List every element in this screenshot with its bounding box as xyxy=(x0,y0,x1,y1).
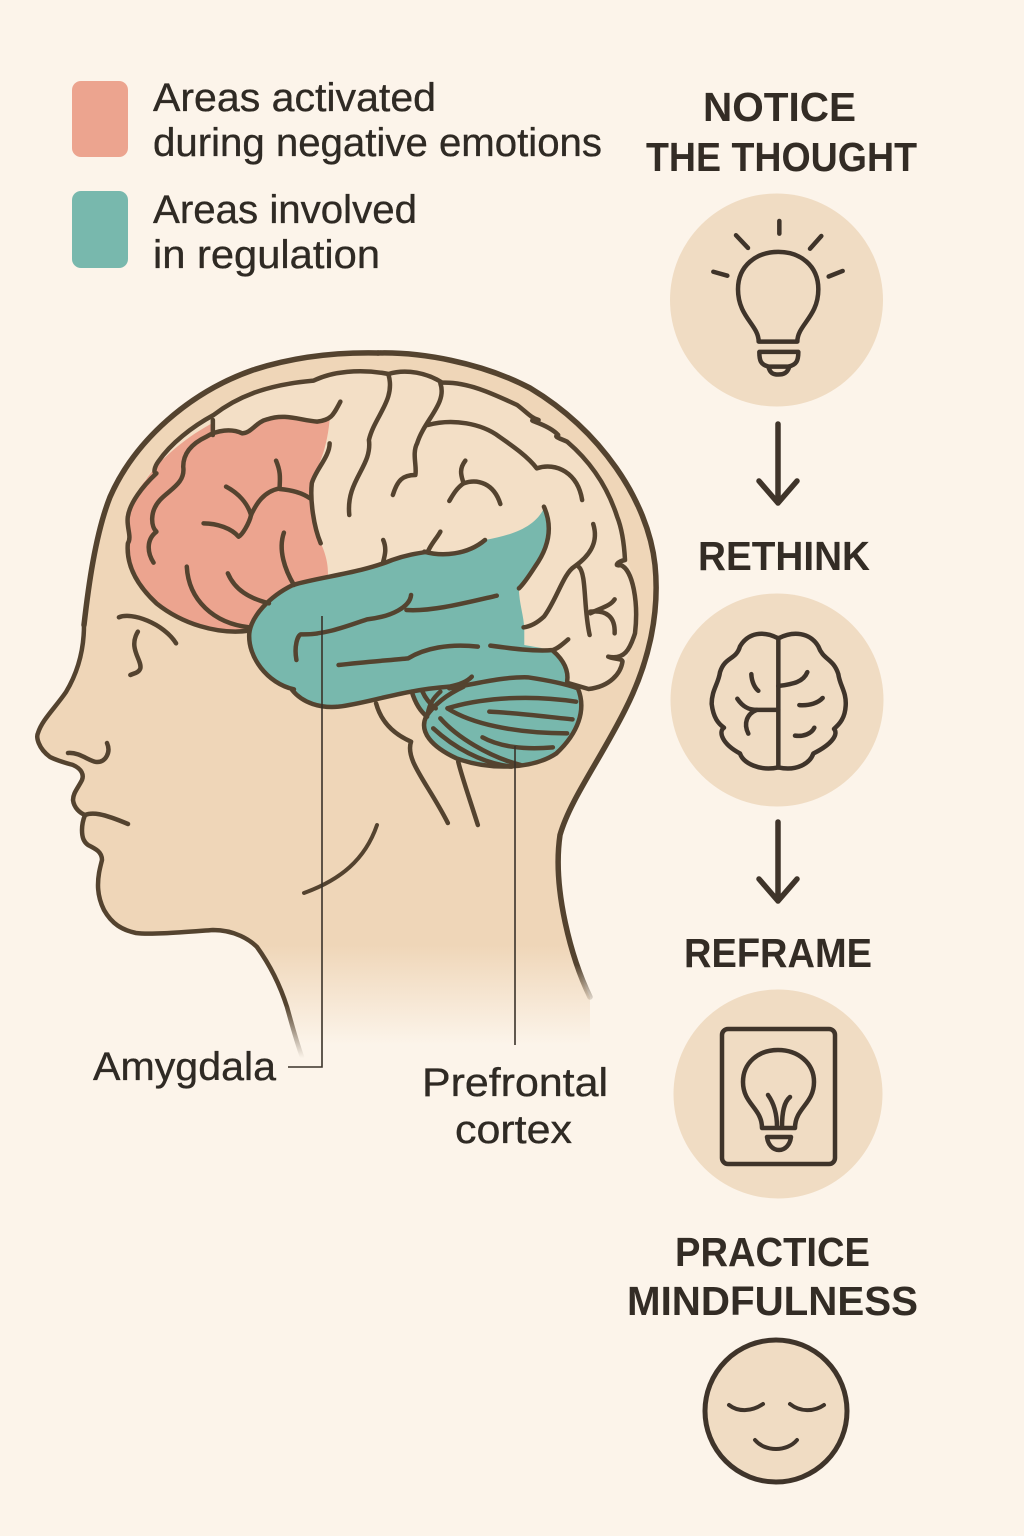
icon: brain xyxy=(670,594,884,806)
label: prefrontal cortex: Prefrontal xyxy=(422,1061,608,1105)
brain base xyxy=(128,371,636,693)
label: amygdala: Amygdala xyxy=(93,1045,277,1089)
legend label: regulation areas: Areas involved xyxy=(153,188,417,232)
step: notice the thought heading: THE THOUGHT xyxy=(646,134,917,180)
icon: calm face xyxy=(705,1340,847,1482)
forehead outline xyxy=(84,353,378,625)
legend swatch: regulation areas xyxy=(72,191,128,268)
regulation region xyxy=(249,508,581,767)
step: practice mindfulness heading: PRACTICE xyxy=(675,1229,870,1275)
head profile illustration xyxy=(37,353,656,1057)
icon: light bulb xyxy=(670,194,883,406)
legend swatch: activated areas xyxy=(72,81,128,157)
activated region xyxy=(128,416,330,631)
skull outline and back of neck xyxy=(378,353,656,997)
step: rethink heading: RETHINK xyxy=(698,533,870,579)
legend label: regulation areas: in regulation xyxy=(153,233,380,277)
nostril xyxy=(68,743,108,762)
brain outlines xyxy=(119,371,636,825)
step: notice the thought heading: NOTICE xyxy=(703,84,856,130)
step: reframe heading: REFRAME xyxy=(684,930,872,976)
label: prefrontal cortex: cortex xyxy=(455,1108,572,1152)
icon: framed light bulb xyxy=(674,990,882,1198)
face and front of neck outline xyxy=(37,625,302,1057)
arrow 2 xyxy=(759,822,797,901)
step: practice mindfulness heading: MINDFULNESS xyxy=(627,1278,918,1324)
jaw line xyxy=(304,825,377,893)
head fill xyxy=(37,353,656,1057)
label: amygdala xyxy=(93,616,322,1089)
legend label: activated areas: Areas activated xyxy=(153,76,436,120)
arrow 1 xyxy=(759,424,797,503)
legend label: activated areas: during negative emotions xyxy=(153,121,602,165)
label: prefrontal cortex xyxy=(422,746,608,1152)
mouth line xyxy=(85,814,128,824)
brain illustration xyxy=(119,371,636,825)
legend xyxy=(72,76,602,277)
